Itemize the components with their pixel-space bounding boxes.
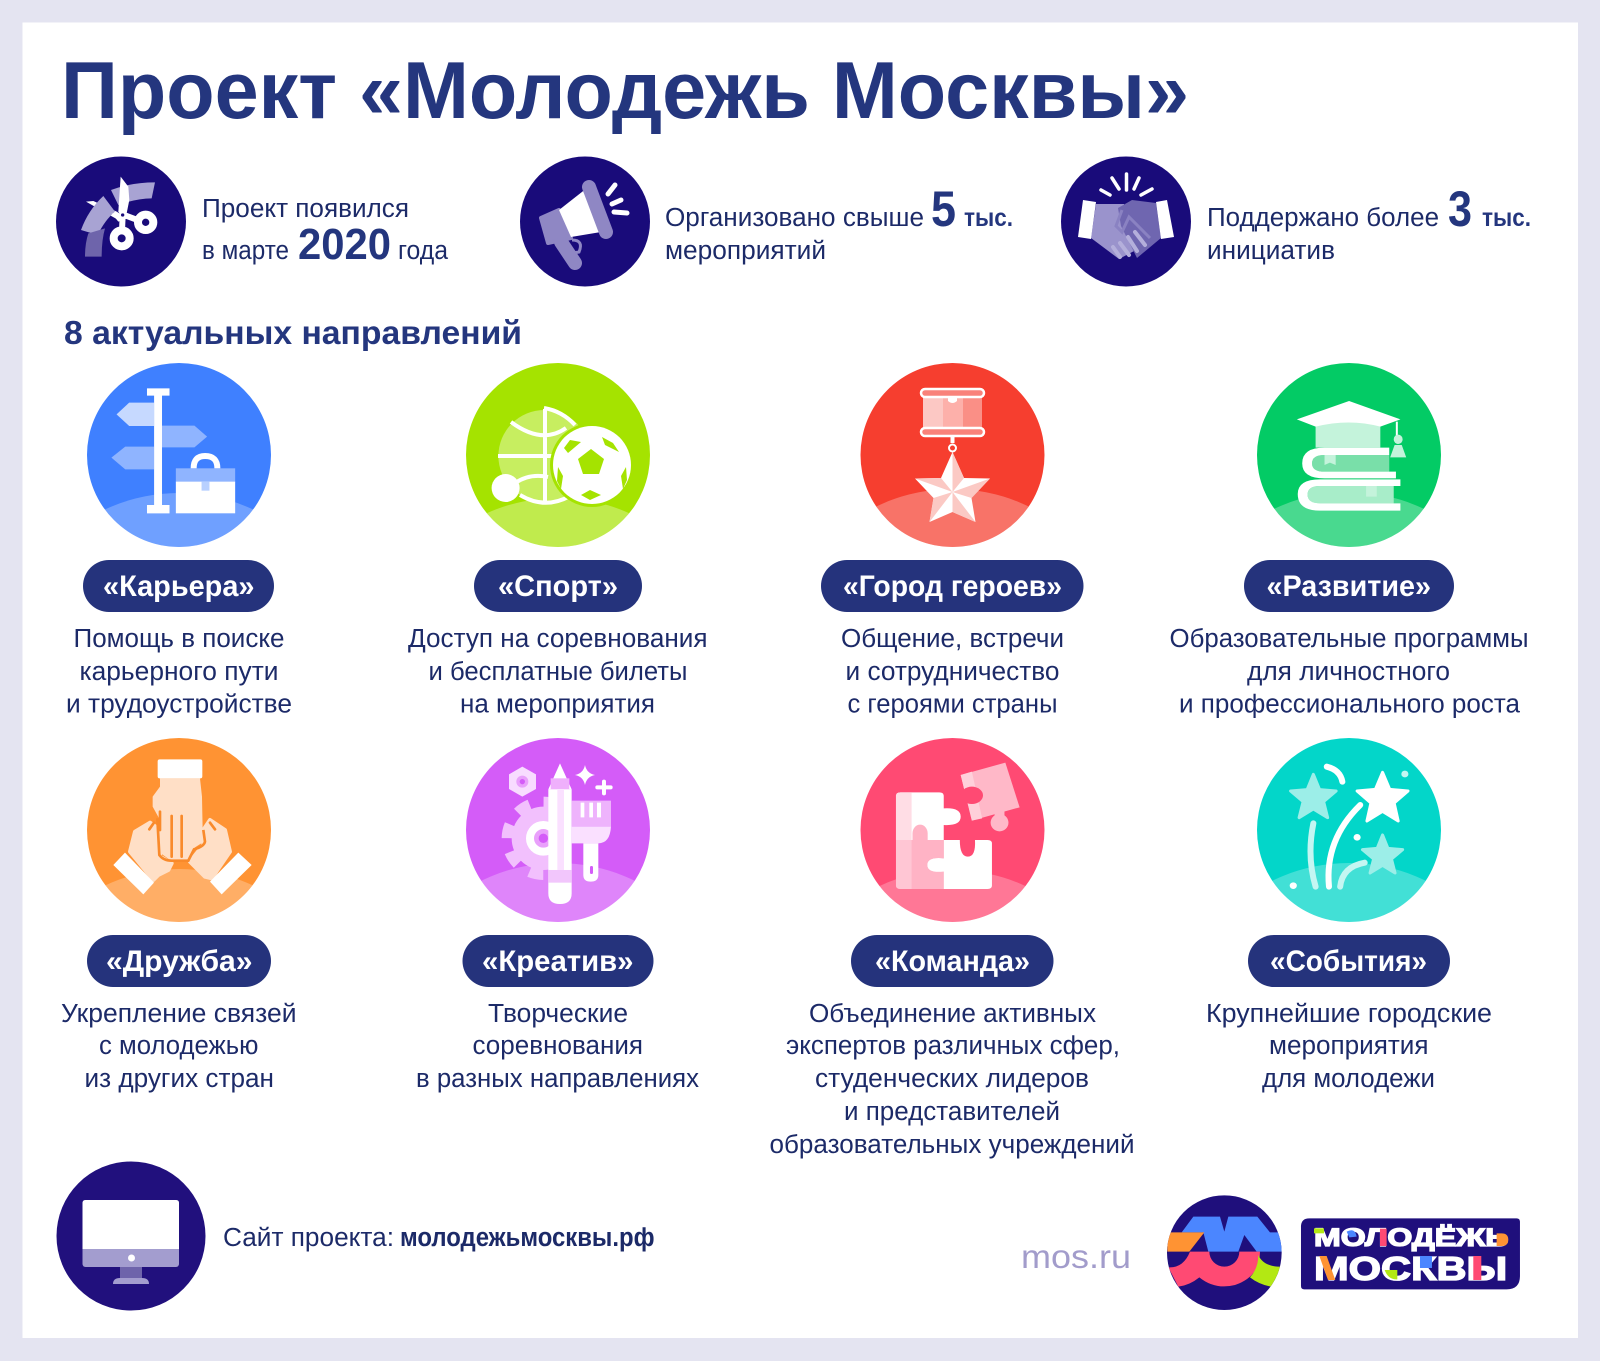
icon: signpost and briefcase — [87, 363, 271, 547]
description: events — [1206, 1000, 1492, 1093]
description: friendship — [61, 1000, 296, 1093]
panel: friendship — [62, 738, 295, 1092]
panel: creative — [418, 738, 699, 1092]
pill: career — [83, 560, 274, 612]
panel: sport — [408, 363, 706, 718]
description: career — [66, 625, 292, 718]
text: launched in March 2020 — [202, 195, 449, 269]
text: over 3 thousand initiatives: Поддержано более — [1207, 204, 1439, 232]
title: Проект «Молодежь Москвы» — [61, 46, 1189, 136]
description: creative — [416, 1000, 699, 1093]
icon: megaphone — [520, 156, 650, 286]
pill: team — [851, 935, 1054, 987]
text: mos.ru: mos.ru — [1021, 1238, 1131, 1275]
icon: puzzle pieces — [860, 738, 1044, 922]
logo: Молодёжь Москвы wordmark badge: МОСКВЫ — [1314, 1250, 1507, 1287]
description: team: и представителей — [844, 1098, 1060, 1126]
text: over 5 thousand events — [665, 181, 1013, 265]
text: over 5 thousand events: тыс. — [964, 204, 1013, 232]
pill: sport — [474, 560, 642, 612]
pill: events: «События» — [1270, 945, 1427, 978]
description: events: для молодежи — [1262, 1065, 1435, 1093]
pill: city of heroes: «Город героев» — [843, 570, 1062, 603]
description: career: и трудоустройстве — [66, 690, 292, 718]
text: launched in March 2020: в марте — [202, 237, 289, 265]
description: sport: и бесплатные билеты — [428, 658, 688, 686]
pill: events — [1248, 935, 1450, 987]
description: events: Крупнейшие городские — [1206, 1000, 1492, 1028]
stat: project launched — [56, 156, 449, 286]
pill: friendship: «Дружба» — [106, 945, 252, 978]
description: development: для личностного — [1247, 658, 1450, 686]
description: team: Объединение активных — [809, 1000, 1096, 1028]
heading: 8 directions: 8 актуальных направлений — [64, 315, 522, 352]
text: over 3 thousand initiatives — [1207, 181, 1531, 265]
description: creative: соревнования — [472, 1032, 643, 1060]
pill: creative — [462, 935, 654, 987]
panel: career — [68, 363, 291, 718]
description: city of heroes — [841, 625, 1064, 718]
text: project website — [223, 1224, 654, 1252]
pill: development — [1244, 560, 1454, 612]
pill: development: «Развитие» — [1266, 570, 1431, 603]
description: team: образовательных учреждений — [770, 1131, 1134, 1159]
text: project website: Сайт проекта: — [223, 1224, 394, 1252]
text: project website: молодежьмосквы.рф — [400, 1224, 654, 1252]
description: sport: Доступ на соревнования — [408, 625, 708, 653]
description: team: экспертов различных сфер, — [786, 1032, 1120, 1060]
pill: friendship — [87, 935, 271, 987]
text: over 5 thousand events: мероприятий — [665, 237, 826, 265]
description: city of heroes: Общение, встречи — [841, 625, 1064, 653]
panel: events — [1208, 738, 1491, 1092]
icon: books and graduation cap — [1257, 363, 1441, 547]
stat: initiatives supported — [1061, 156, 1531, 286]
description: development: Образовательные программы — [1170, 625, 1528, 653]
pill: creative: «Креатив» — [482, 945, 634, 978]
icon: fireworks stars — [1257, 738, 1441, 922]
panel: city of heroes — [821, 363, 1084, 718]
text: launched in March 2020: 2020 — [298, 220, 391, 269]
text: over 3 thousand initiatives: 3 — [1448, 181, 1472, 237]
description: team — [770, 1000, 1134, 1159]
pill: career: «Карьера» — [103, 570, 254, 603]
text: over 5 thousand events: Организовано свыше — [665, 204, 924, 232]
description: career: карьерного пути — [80, 658, 278, 686]
icon: handshake — [1061, 156, 1191, 286]
pill: sport: «Спорт» — [498, 570, 618, 603]
description: development: и профессионального роста — [1179, 690, 1521, 718]
description: friendship: Укрепление связей — [61, 1000, 296, 1028]
pill: team: «Команда» — [875, 945, 1030, 978]
panel: development — [1170, 363, 1527, 718]
text: launched in March 2020: Проект появился — [202, 195, 409, 223]
text: launched in March 2020: года — [398, 237, 449, 265]
description: sport — [408, 625, 708, 718]
description: friendship: из других стран — [84, 1065, 274, 1093]
logo: Молодёжь Москвы wordmark badge — [1301, 1218, 1520, 1289]
icon: gold star medal — [860, 363, 1044, 547]
icon: three joined hands — [87, 738, 271, 922]
stat: events organised — [520, 156, 1013, 286]
description: events: мероприятия — [1269, 1032, 1428, 1060]
icon: scissors cutting ribbon — [56, 156, 186, 286]
panel: team — [770, 738, 1133, 1158]
description: creative: Творческие — [488, 1000, 628, 1028]
pill: city of heroes — [821, 560, 1084, 612]
icon: desktop monitor — [56, 1162, 206, 1310]
text: over 5 thousand events: 5 — [931, 181, 956, 237]
description: creative: в разных направлениях — [416, 1065, 699, 1093]
logo: Молодёжь Москвы wordmark badge: МОЛОДЁЖЬ — [1314, 1224, 1508, 1252]
description: friendship: с молодежью — [99, 1032, 258, 1060]
description: city of heroes: с героями страны — [848, 690, 1058, 718]
text: over 3 thousand initiatives: тыс. — [1482, 204, 1531, 232]
description: development — [1170, 625, 1528, 718]
icon: basketball and soccer ball — [466, 363, 650, 547]
icon: pencil, gear and brush — [466, 738, 650, 922]
description: career: Помощь в поиске — [74, 625, 284, 653]
logo: circular M emblem — [1167, 1195, 1282, 1310]
text: over 3 thousand initiatives: инициатив — [1207, 237, 1335, 265]
description: city of heroes: и сотрудничество — [846, 658, 1060, 686]
description: team: студенческих лидеров — [815, 1065, 1089, 1093]
description: sport: на мероприятия — [460, 690, 655, 718]
